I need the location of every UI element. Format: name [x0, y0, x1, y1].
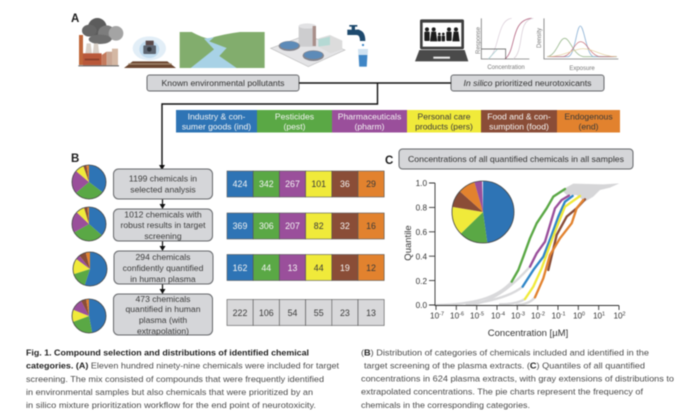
pie chart: 473 chemicals: [72, 299, 106, 333]
category: pesticides: [257, 110, 332, 132]
x axis tick labels: [430, 312, 626, 320]
chart label: Exposure: Exposure: [569, 66, 595, 72]
chart label: Density: Density: [537, 28, 543, 48]
count row: 294 chemicals by category: 44: [261, 263, 271, 273]
caption: left column: in environmental samples but also chemicals that were prioritized by an: [26, 387, 313, 397]
count row: 1199 chemicals by category: [227, 171, 384, 197]
category: personal care: [407, 110, 481, 132]
x axis tick labels: 10: [613, 312, 623, 320]
y axis tick labels: [416, 179, 427, 310]
chart label: Concentration: Concentration: [487, 65, 525, 71]
panel label B: B: [71, 153, 79, 165]
category: personal care: Personal care: [417, 112, 471, 122]
icon: tractor on field: [124, 36, 176, 68]
x axis tick labels: 10: [470, 312, 479, 320]
count row: 1199 chemicals by category: 36: [340, 179, 350, 189]
category: industry: sumer goods (ind): [182, 122, 251, 132]
count row: 294 chemicals by category: 19: [340, 263, 350, 273]
y axis tick labels: 0.8: [416, 204, 427, 212]
category: endogenous: [557, 110, 620, 132]
category: pharmaceuticals: (pharm): [354, 122, 385, 132]
pie chart: 1199 chemicals: [72, 165, 106, 199]
category: pesticides: (pest): [284, 122, 306, 132]
x axis tick labels: 1: [602, 312, 605, 318]
x axis tick labels: 10: [593, 312, 602, 320]
x axis tick labels: 0: [582, 312, 585, 318]
count row: 1012 chemicals by category: 16: [366, 221, 376, 231]
x axis tick labels: 10: [573, 312, 582, 320]
panel C heading box: [399, 149, 633, 169]
flow box: 1012 chemicals: [114, 209, 212, 241]
category: endogenous: (end): [578, 122, 599, 132]
count row: 1199 chemicals by category: 424: [233, 179, 247, 189]
flow box: 473 chemicals: [114, 294, 212, 336]
icon: laptop with family: [415, 19, 468, 61]
panel label C: C: [385, 155, 393, 167]
caption: right column: concentrations in 624 plasma extracts, with gray extensions of distributions to: [361, 374, 674, 384]
y axis tick labels: 0.0: [416, 301, 427, 310]
y axis tick labels: 0.6: [416, 228, 427, 237]
flow box: 473 chemicals: extrapolation): [137, 326, 189, 336]
axes and ticks: [429, 183, 619, 310]
flow box: 1199 chemicals: 1199 chemicals in: [129, 174, 197, 184]
caption: right column: (B) Distribution of categories of chemicals included and identified in the: [361, 348, 649, 358]
flow box: 473 chemicals: 473 chemicals: [136, 294, 190, 304]
category: personal care: products (pers): [415, 122, 473, 132]
panel C heading box: Concentrations of all quantified chemicals in all samples: [408, 154, 624, 164]
y axis title: Quantile: [403, 225, 414, 261]
flow box: 1012 chemicals: 1012 chemicals with: [124, 210, 202, 220]
y axis tick labels: 0.4: [416, 252, 427, 262]
count row: 294 chemicals by category: 162: [233, 263, 247, 273]
count row: 473 chemicals by category: 23: [340, 308, 350, 318]
label box: in silico prioritized neurotoxicants: [451, 75, 604, 91]
x axis tick labels: 2: [623, 312, 626, 318]
category: pesticides: Pesticides: [275, 112, 314, 122]
caption: left column: [26, 348, 340, 410]
category legend bar: [176, 110, 620, 132]
x axis tick labels: -2: [540, 312, 545, 318]
connector: merge into selected analysis arrow: [159, 83, 451, 170]
category: pharmaceuticals: Pharmaceuticals: [338, 112, 401, 122]
count row: 473 chemicals by category: [227, 300, 384, 326]
count row: 1199 chemicals by category: 101: [311, 179, 326, 189]
x axis tick labels: -6: [459, 312, 464, 318]
count row: 1012 chemicals by category: [227, 213, 384, 239]
gray extrapolated curves: [437, 183, 619, 305]
category: endogenous: Endogenous: [564, 112, 613, 122]
chart: exposure density curves: [544, 18, 618, 59]
flow connectors between boxes: [160, 199, 166, 294]
caption: left column: categories. (A) Eleven hundred ninety-nine chemicals were included for target: [26, 360, 340, 370]
category: food: Food and & con-: [487, 112, 551, 122]
count row: 473 chemicals by category: 55: [314, 308, 324, 318]
caption: left column: screening. The mix consisted of compounds that were frequently identified: [26, 374, 324, 384]
flow box: 294 chemicals: confidently quantified: [123, 263, 204, 273]
x axis tick labels: 10: [491, 312, 500, 320]
x axis tick labels: 10: [450, 312, 459, 320]
flow box: 294 chemicals: [114, 251, 213, 284]
caption: left column: Fig. 1. Compound selection and distributions of identified chemical: [26, 348, 309, 358]
category: food: sumption (food): [489, 122, 549, 132]
label box: known environmental pollutants: [147, 75, 299, 91]
panel label A: A: [71, 13, 79, 25]
count row: 1012 chemicals by category: 207: [285, 221, 300, 231]
x axis tick labels: -4: [500, 312, 505, 318]
caption: right column: [361, 348, 674, 410]
icon: tap and glass of water: [347, 25, 368, 67]
category: pharmaceuticals: [332, 110, 407, 132]
count row: 294 chemicals by category: [227, 254, 384, 280]
count row: 473 chemicals by category: 54: [288, 308, 297, 318]
x axis tick labels: 10: [531, 312, 540, 320]
flow box: 473 chemicals: plasma (with: [139, 315, 187, 325]
x axis tick labels: 10: [511, 312, 520, 320]
chart label: Response: Response: [476, 26, 482, 54]
flow box: 473 chemicals: quantified in human: [125, 304, 201, 314]
x axis tick labels: 10: [552, 312, 561, 320]
category: industry: Industry & con-: [188, 112, 246, 122]
pie chart: 294 chemicals: [73, 252, 107, 286]
x axis tick labels: -7: [439, 312, 444, 318]
caption: right column: extrapolated concentrations. The pie charts represent the frequency of: [361, 386, 644, 396]
count row: 294 chemicals by category: 13: [288, 263, 297, 273]
caption: right column: chemicals in the corresponding categories.: [361, 400, 530, 410]
x axis tick labels: 10: [430, 312, 439, 320]
flow box: 294 chemicals: 294 chemicals: [136, 252, 190, 262]
flow box: 1199 chemicals: [114, 169, 212, 199]
count row: 1012 chemicals by category: 32: [340, 221, 350, 231]
count row: 294 chemicals by category: 12: [366, 263, 376, 273]
count row: 294 chemicals by category: 44: [314, 263, 324, 273]
x axis tick labels: -3: [520, 312, 525, 318]
count row: 1199 chemicals by category: 29: [366, 179, 376, 189]
count row: 1012 chemicals by category: 306: [259, 221, 274, 231]
flow box: 1012 chemicals: robust results in target: [120, 220, 206, 230]
flow box: 294 chemicals: in human plasma: [130, 274, 196, 284]
count row: 1199 chemicals by category: 267: [285, 179, 300, 189]
label box: in silico prioritized neurotoxicants: In silico prioritized neurotoxicants: [464, 78, 592, 88]
x axis title: Concentration [µM]: [488, 328, 568, 339]
count row: 473 chemicals by category: 13: [366, 308, 376, 318]
count row: 473 chemicals by category: 106: [259, 308, 274, 318]
count row: 1199 chemicals by category: 342: [259, 179, 274, 189]
icon: water treatment plant: [271, 23, 345, 67]
colored quantile curves: [512, 189, 585, 299]
count row: 1012 chemicals by category: 82: [314, 221, 324, 231]
category: food: [481, 110, 557, 132]
icon: factory with smoke: [78, 18, 123, 66]
y axis tick labels: 0.2: [416, 277, 427, 286]
count row: 473 chemicals by category: 222: [233, 308, 247, 318]
quantile chart: [403, 179, 626, 339]
chart: dose response curves: [481, 18, 533, 59]
label box: known environmental pollutants: Known environmental pollutants: [162, 78, 284, 88]
x axis tick labels: -5: [479, 312, 484, 318]
inset pie chart: [452, 181, 514, 243]
count row: 1012 chemicals by category: 369: [233, 221, 247, 231]
category: industry: [176, 110, 257, 132]
flow box: 1199 chemicals: selected analysis: [130, 184, 196, 194]
flow box: 1012 chemicals: screening: [144, 231, 182, 241]
icon: river landscape: [180, 32, 265, 68]
caption: left column: in silico mixture prioritization workflow for the end point of neurotoxicity.: [26, 400, 316, 410]
x axis tick labels: -1: [561, 312, 565, 318]
pie chart: 1012 chemicals: [72, 207, 106, 241]
caption: right column: target screening of the plasma extracts. ( C) Quantiles of all quantified: [364, 360, 645, 370]
y axis tick labels: 1.0: [416, 179, 427, 188]
